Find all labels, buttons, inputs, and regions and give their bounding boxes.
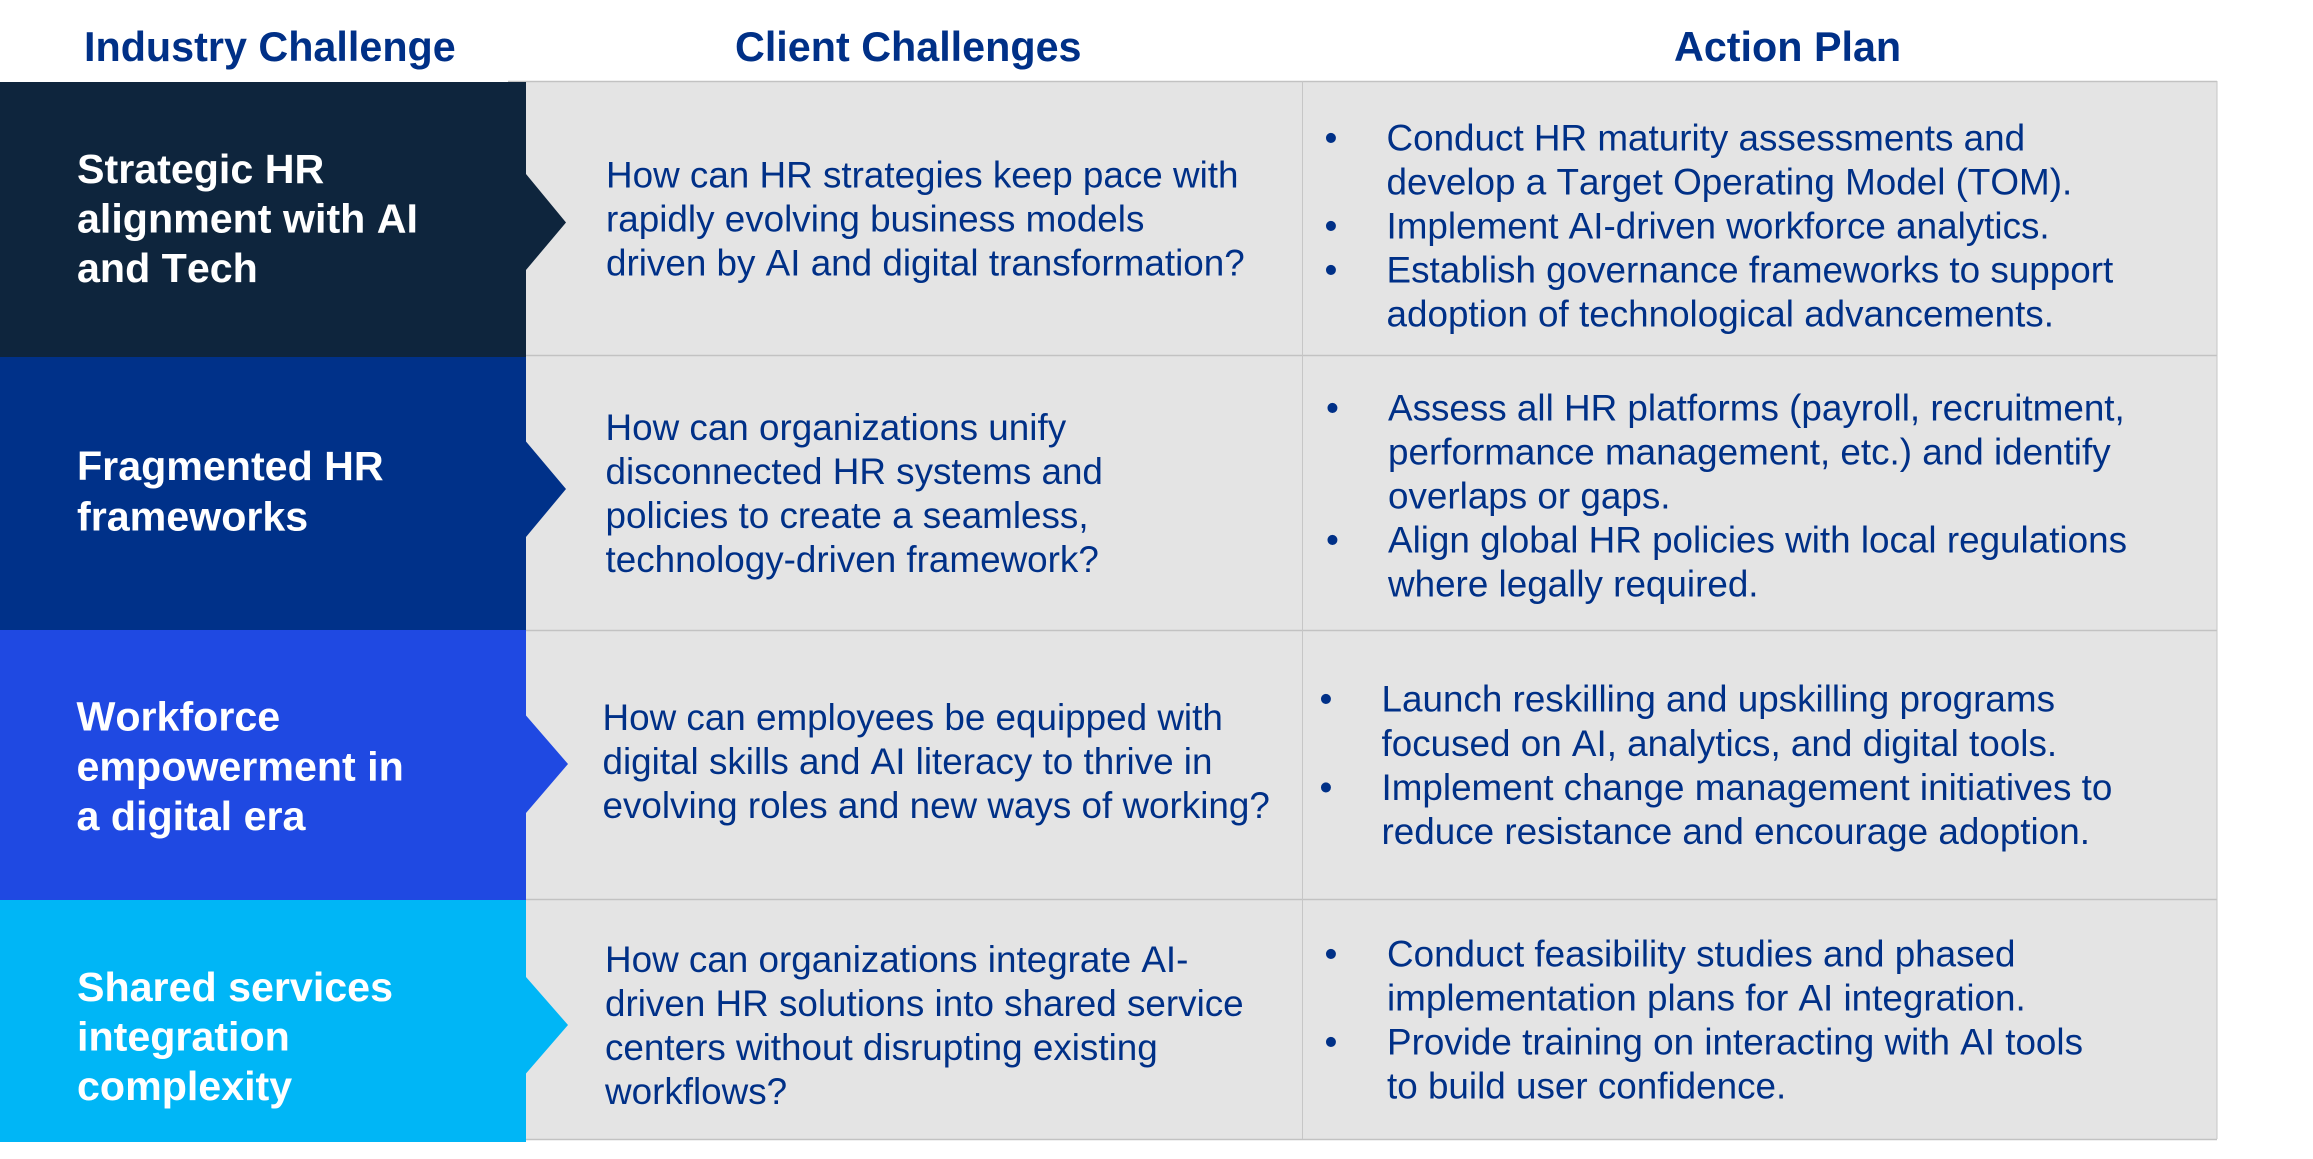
row 3 title: Workforce [76,694,280,740]
row 4 title: Shared services [77,964,393,1010]
row 2 title: Fragmented HR [77,443,384,489]
panel: row 1 industry challenge [0,82,566,357]
action plan row 4 [1325,934,2083,1106]
action items: Implement change management initiatives to [1382,767,2112,808]
client challenge row 4: How can organizations integrate AI- [605,939,1188,980]
action items: reduce resistance and encourage adoption. [1382,811,2090,852]
chevron block [0,900,568,1142]
row 1 title: alignment with AI [77,196,418,242]
bullets: • [1320,678,1332,720]
chevron block [0,630,568,900]
row 1 title: Strategic HR [77,146,324,192]
client challenge row 1: How can HR strategies keep pace with [606,154,1239,196]
action items: Implement AI-driven workforce analytics. [1386,206,2050,246]
client challenge row 2: policies to create a seamless, [606,495,1089,536]
table background [508,81,2217,1140]
bullets: • [1320,767,1332,808]
row 2 title: frameworks [77,494,308,540]
panel: row 3 industry challenge [0,630,568,900]
action items: focused on AI, analytics, and digital tools. [1382,723,2057,764]
action items: Assess all HR platforms (payroll, recruitment, [1388,388,2125,428]
heading: Client Challenges: Client Challenges [735,24,1082,70]
client challenge row 1: rapidly evolving business models [606,198,1144,240]
bullets: • [1325,118,1337,158]
action items: overlaps or gaps. [1388,476,1671,516]
action plan row 2 [1326,388,2127,604]
row 1 title: and Tech [77,245,258,291]
action items: Conduct HR maturity assessments and [1386,118,2025,158]
client challenge row 4: centers without disrupting existing [605,1027,1158,1068]
client challenge row 2: How can organizations unify [606,407,1067,448]
client challenge row 3: evolving roles and new ways of working? [602,785,1270,826]
action items: adoption of technological advancements. [1386,294,2054,334]
client challenge row 2: technology-driven framework? [606,539,1099,580]
action items: to build user confidence. [1387,1066,1786,1106]
chevron block [0,82,566,357]
action items: performance management, etc.) and identify [1388,432,2111,472]
bullets: • [1325,250,1337,290]
action items: where legally required. [1387,564,1759,604]
action plan row 1 [1325,118,2113,334]
client challenge row 3: digital skills and AI literacy to thrive in [602,741,1212,782]
bullets: • [1325,1022,1337,1062]
panel: row 2 industry challenge [0,357,566,630]
heading: Industry Challenge: Industry Challenge [84,24,456,70]
client challenge row 4: driven HR solutions into shared service [605,983,1244,1024]
row 3 title: empowerment in [76,744,404,790]
bullets: • [1326,520,1339,560]
action items: Provide training on interacting with AI tools [1387,1022,2083,1062]
action items: implementation plans for AI integration. [1387,978,2026,1018]
heading: Action Plan: Action Plan [1674,24,1901,70]
action plan row 3 [1320,678,2112,852]
client challenge row 3: How can employees be equipped with [602,697,1223,738]
action items: Establish governance frameworks to support [1386,250,2113,290]
action items: Conduct feasibility studies and phased [1387,934,2016,974]
bullets: • [1325,934,1337,974]
action items: Align global HR policies with local regulations [1388,520,2127,560]
client challenge row 4: workflows? [604,1071,787,1112]
bullets: • [1326,388,1339,428]
panel: row 4 industry challenge [0,900,568,1142]
client challenge row 2: disconnected HR systems and [606,451,1103,492]
action items: develop a Target Operating Model (TOM). [1386,162,2072,202]
bullets: • [1325,206,1337,246]
row 4 title: complexity [77,1063,292,1109]
row 3 title: a digital era [76,793,306,839]
chevron block [0,357,566,630]
action items: Launch reskilling and upskilling programs [1382,678,2055,720]
client challenge row 1: driven by AI and digital transformation? [606,242,1245,284]
row 4 title: integration [77,1014,290,1060]
